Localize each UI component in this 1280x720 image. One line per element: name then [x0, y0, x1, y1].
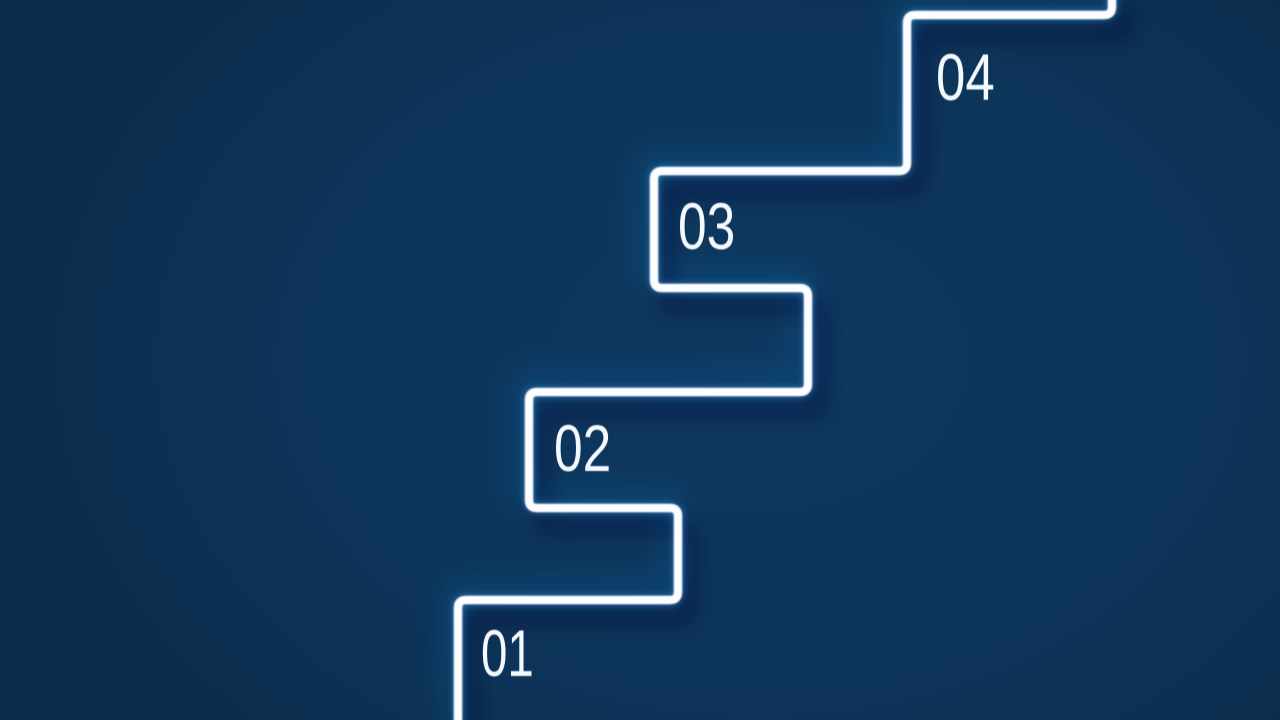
staircase line [453, 0, 1124, 720]
step label 03: 03 [678, 189, 735, 263]
step label 04: 04 [936, 40, 995, 114]
step label 02: 02 [554, 411, 611, 485]
step label 01: 01 [481, 617, 534, 691]
